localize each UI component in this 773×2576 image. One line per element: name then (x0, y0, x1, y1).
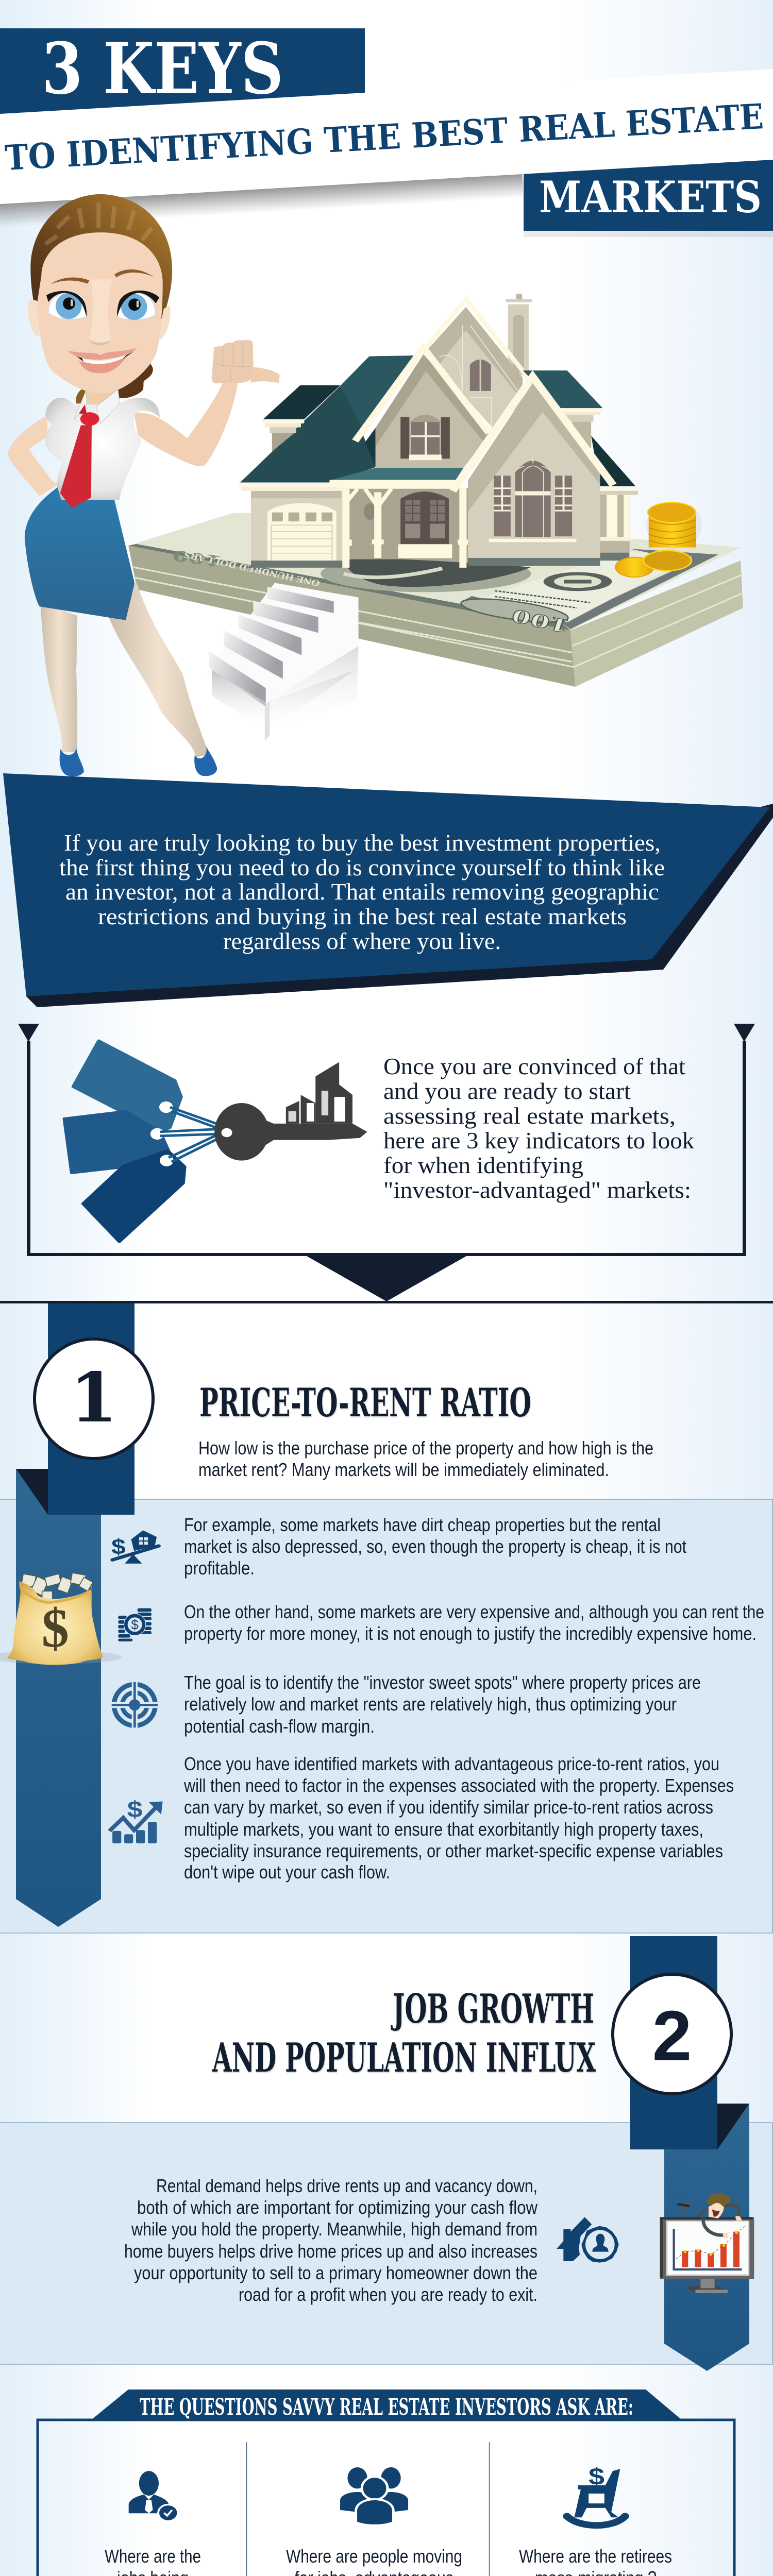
question texts (105, 2546, 672, 2576)
icon: key with tags and city (64, 1041, 367, 1242)
icon: growth chart: $ (127, 1797, 143, 1822)
icon: rocking chair with dollar: $ (589, 2463, 604, 2489)
key indicators text: here are 3 key indicators to look (383, 1127, 694, 1154)
key indicators text: "investor-advantaged" markets: (383, 1177, 691, 1203)
skirt (25, 487, 135, 620)
hair (30, 194, 172, 319)
roofs (240, 355, 635, 486)
collar (74, 389, 120, 423)
intro panel: If you are truly looking to buy the best investment properties, (64, 829, 661, 856)
questions box frame (38, 2420, 737, 2576)
centre gable (355, 348, 492, 470)
gold coins (615, 501, 702, 577)
section 1 body text: potential cash-flow margin. (184, 1716, 375, 1737)
intro panel: an investor, not a landlord. That entails removing geographic (65, 878, 659, 905)
section 1 intro text: market rent? Many markets will be immediately eliminated. (198, 1459, 609, 1480)
section 1 body text (183, 1514, 764, 1883)
bracket frame with arrow (18, 1024, 755, 1301)
blouse (45, 398, 160, 500)
section 1 body text: multiple markets, you want to ensure that exorbitantly high property taxes, (184, 1819, 703, 1840)
heading: price-to-rent ratio: PRICE-TO-RENT RATIO (199, 1380, 531, 1426)
right wing (599, 487, 638, 561)
icon: job person (129, 2471, 178, 2521)
money bag illustration (0, 1573, 122, 1665)
number 2 (613, 1974, 731, 2094)
house on the money (239, 294, 702, 577)
questions banner heading (91, 2389, 682, 2420)
section 1 panel (0, 1499, 772, 1933)
mouth (79, 357, 126, 373)
ears (28, 299, 40, 336)
question texts: Where are the retirees (519, 2546, 672, 2567)
hand with thumb (212, 340, 280, 383)
section 2 body text: your opportunity to sell to a primary homeowner down the (134, 2262, 537, 2283)
key indicators text: for when identifying (383, 1152, 583, 1178)
header: markets tab (524, 152, 773, 237)
money stack: ONE HUNDRED DOLLARS (183, 550, 322, 588)
arm raised (134, 383, 238, 466)
staircase (207, 583, 359, 741)
front gable (453, 377, 613, 566)
intro panel: regardless of where you live. (223, 928, 501, 954)
section 2 body text: Rental demand helps drive rents up and vacancy down, (156, 2175, 537, 2196)
brows (51, 269, 154, 284)
heading: job growth and population influx: JOB GROWTH (391, 1986, 594, 2032)
tie (60, 404, 99, 508)
icon: growth chart (109, 1797, 163, 1843)
icon: scale with house: $ (111, 1535, 126, 1559)
icon: target (111, 1681, 158, 1728)
garage and porch (239, 468, 469, 568)
eyes (48, 293, 87, 319)
legs and shoes (40, 582, 217, 776)
question texts: Where are people moving (286, 2546, 462, 2567)
back gable (426, 299, 529, 431)
intro panel: the first thing you need to do is convince yourself to think like (59, 854, 665, 880)
hair bun (116, 362, 153, 398)
icon: scale with house (111, 1530, 159, 1564)
icon: rocking chair with dollar (567, 2463, 625, 2526)
icon: coin stacks: $ (131, 1617, 139, 1633)
arm on hip (8, 415, 58, 496)
header: banner shadow (0, 174, 524, 228)
key indicators text: and you are ready to start (383, 1078, 631, 1104)
section 2 body text: home buyers helps drive home prices up and also increases (124, 2241, 537, 2262)
character: businesswoman (8, 194, 280, 776)
face (38, 232, 163, 394)
section 1 intro text (198, 1437, 653, 1480)
number 2: 2 (652, 1996, 692, 2076)
icon: coin stacks (118, 1608, 152, 1641)
section 1 intro text: How low is the purchase price of the property and how high is the (198, 1437, 653, 1459)
section 1 ribbon (16, 1303, 153, 1927)
key indicators text (383, 1053, 694, 1203)
section 2 body text (124, 2175, 538, 2305)
monitor with chart illustration (660, 2193, 754, 2293)
intro panel (3, 773, 773, 1007)
number 1: 1 (70, 1358, 117, 1438)
section 1 body text: relatively low and market rents are relatively high, thus optimizing your (184, 1693, 677, 1715)
intro panel: restrictions and buying in the best real estate markets (98, 903, 627, 929)
key and skyline (214, 1062, 367, 1161)
money bag illustration: $ (42, 1598, 69, 1659)
money stack: 100 (171, 546, 223, 571)
header: 3 keys tab: 3 KEYS (42, 27, 283, 110)
nose (88, 340, 111, 346)
icon: house with person badge (557, 2217, 619, 2263)
stair shadow (212, 670, 356, 732)
section 2 body text: while you hold the property. Meanwhile, high demand from (131, 2218, 537, 2240)
question texts: Where are the (105, 2546, 201, 2567)
chimney (506, 294, 532, 375)
icon: group of people (340, 2467, 408, 2526)
section 2 panel (0, 2123, 772, 2364)
money stack: 100 (509, 605, 572, 638)
section 1 body text: don't wipe out your cash flow. (184, 1861, 390, 1883)
key indicators text: assessing real estate markets, (383, 1103, 676, 1129)
section 1 icons (109, 1530, 163, 1843)
number 1 (35, 1339, 153, 1459)
section 1 body text: For example, some markets have dirt cheap properties but the rental (184, 1514, 661, 1535)
questions: column dividers (246, 2442, 490, 2576)
section 2 ribbon (613, 1936, 749, 2371)
section 2 body text: road for a profit when you are ready to exit. (239, 2284, 537, 2305)
section 1 body text: profitable. (184, 1557, 255, 1579)
key tags (64, 1041, 224, 1242)
heading: job growth and population influx (212, 1986, 596, 2081)
neck (85, 388, 119, 413)
section 1 body text: market is also depressed, so, even though the property is cheap, it is not (184, 1536, 686, 1557)
key indicators text: Once you are convinced of that (383, 1053, 685, 1079)
header: white slanted banner (0, 69, 773, 204)
section 2 body text: both of which are important for optimizing your cash flow (137, 2197, 538, 2218)
money stack (128, 512, 743, 687)
